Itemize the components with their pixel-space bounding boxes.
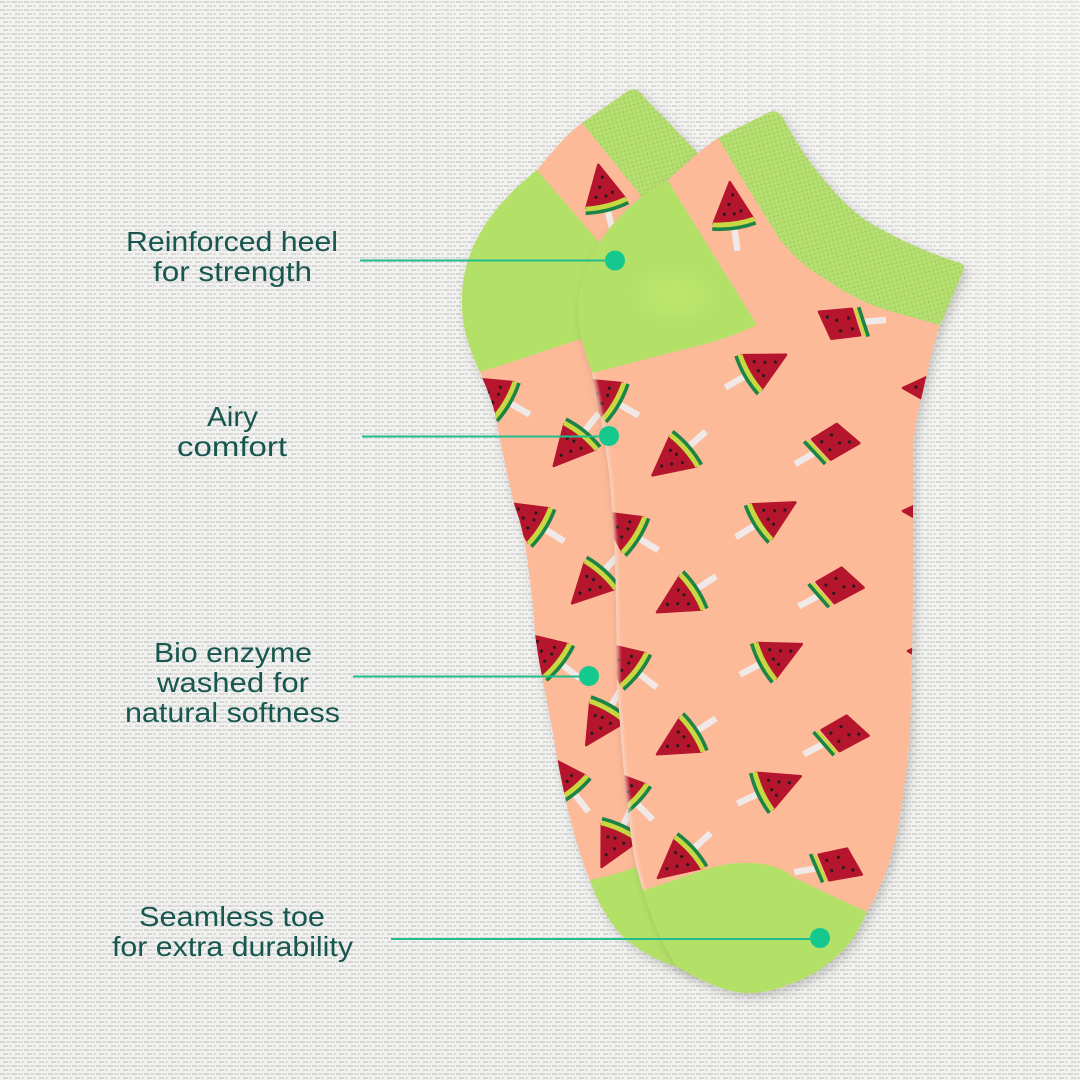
front sock toe xyxy=(643,862,868,994)
front sock xyxy=(560,100,980,1000)
back sock watermelon motifs xyxy=(482,164,632,868)
back sock toe xyxy=(590,867,678,968)
heel leader line xyxy=(360,250,625,270)
back sock cuff xyxy=(582,89,698,196)
bio enzyme label: natural softness xyxy=(125,697,340,728)
airy label: Airy xyxy=(207,401,258,432)
seamless toe leader line xyxy=(391,928,830,948)
back sock xyxy=(460,89,700,980)
seamless toe label: Seamless toe xyxy=(139,901,325,932)
front sock heel xyxy=(578,181,757,373)
callout: reinforced heel xyxy=(126,226,625,287)
seamless toe label: for extra durability xyxy=(112,931,353,962)
back sock heel xyxy=(462,170,600,372)
seamless toe label xyxy=(112,901,353,962)
bio enzyme leader line xyxy=(353,666,599,686)
bio enzyme label: washed for xyxy=(156,667,309,698)
callout: seamless toe xyxy=(112,901,830,962)
callout: bio enzyme xyxy=(125,637,599,728)
callout: airy comfort xyxy=(177,401,619,462)
back sock details xyxy=(462,89,698,968)
front sock cuff xyxy=(718,111,964,325)
front sock watermelon motifs xyxy=(568,179,977,896)
front sock details xyxy=(560,100,980,1000)
heel label: for strength xyxy=(153,256,312,287)
airy label xyxy=(177,401,287,462)
bio enzyme label xyxy=(125,637,340,728)
airy label: comfort xyxy=(177,431,287,462)
heel label xyxy=(126,226,338,287)
heel label: Reinforced heel xyxy=(126,226,338,257)
bio enzyme label: Bio enzyme xyxy=(154,637,312,668)
airy leader line xyxy=(362,426,619,446)
